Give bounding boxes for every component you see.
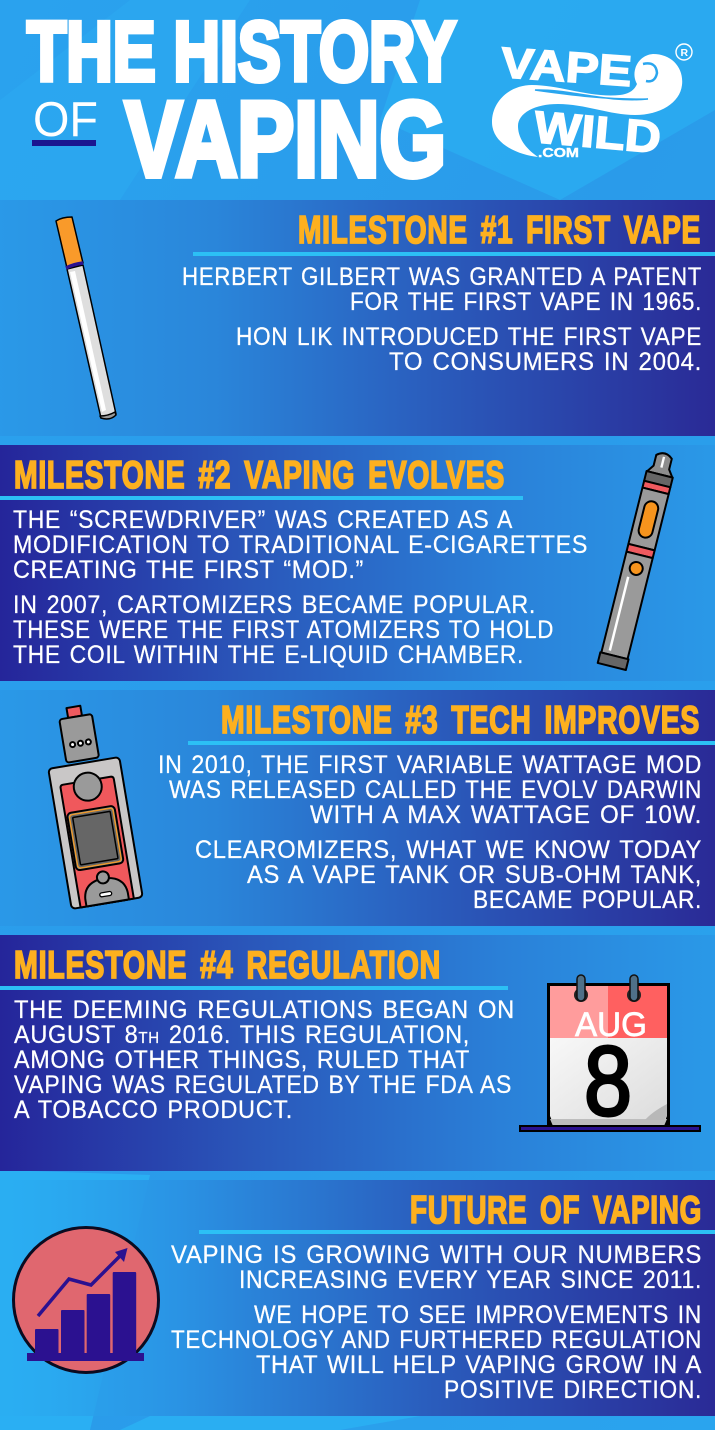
logo wave xyxy=(492,54,682,157)
panel: future of vaping xyxy=(0,1180,715,1416)
text: milestone 2: THE “SCREWDRIVER” WAS CREATED AS A xyxy=(13,506,513,534)
text: milestone 2 xyxy=(13,506,588,669)
text: milestone 2: CREATING THE FIRST “MOD.” xyxy=(13,556,364,584)
logo word: vape: VAPE xyxy=(499,39,633,96)
icon: growth chart xyxy=(14,1228,158,1372)
text: milestone 1 xyxy=(182,263,702,376)
logo word: wild: WILD xyxy=(532,101,663,163)
text: milestone 4: THE DEEMING REGULATIONS BEGAN ON xyxy=(14,996,515,1024)
text: future of vaping xyxy=(171,1241,702,1404)
text: milestone 2: THE COIL WITHIN THE E-LIQUID CHAMBER. xyxy=(13,641,524,669)
calendar date: 8 xyxy=(584,1026,632,1136)
panel: milestone 4 xyxy=(0,935,715,1171)
underline under of xyxy=(32,140,96,146)
text: milestone 3: AS A VAPE TANK OR SUB-OHM TANK, xyxy=(247,861,702,889)
panel: milestone 1 xyxy=(0,200,715,436)
text: milestone 3: WITH A MAX WATTAGE OF 10W. xyxy=(310,801,702,829)
calendar month: AUG xyxy=(575,1006,647,1044)
text: future of vaping: VAPING IS GROWING WITH OUR NUMBERS xyxy=(171,1241,702,1269)
text: milestone 4: AUGUST 8TH 2016. THIS REGULATION, xyxy=(14,1021,470,1049)
icon: vape pen xyxy=(598,450,679,670)
text: milestone 2: MODIFICATION TO TRADITIONAL E-CIGARETTES xyxy=(13,531,588,559)
icon: e-cigarette xyxy=(56,217,116,419)
panel: milestone 3 xyxy=(0,690,715,926)
title xyxy=(27,4,456,199)
icon: box mod xyxy=(39,701,143,909)
text: milestone 1: TO CONSUMERS IN 2004. xyxy=(389,348,702,376)
title word: vaping: VAPING xyxy=(125,79,446,199)
logo: vape wild xyxy=(492,39,692,163)
registered mark xyxy=(676,44,692,60)
text: milestone 4 xyxy=(14,996,515,1124)
title word: of: OF xyxy=(33,93,98,147)
panel: milestone 2 xyxy=(0,445,715,681)
heading: milestone 4: MILESTONE #4 REGULATION xyxy=(14,944,441,987)
icon: calendar xyxy=(520,975,700,1136)
text: milestone 4: AMONG OTHER THINGS, RULED THAT xyxy=(14,1046,470,1074)
heading: milestone 2: MILESTONE #2 VAPING EVOLVES xyxy=(14,454,505,497)
text: milestone 2: THESE WERE THE FIRST ATOMIZERS TO HOLD xyxy=(13,616,554,644)
title line: the history: THE HISTORY xyxy=(27,4,456,98)
text: milestone 4: A TOBACCO PRODUCT. xyxy=(14,1096,293,1124)
text: milestone 3: CLEAROMIZERS, WHAT WE KNOW TODAY xyxy=(195,836,702,864)
text: milestone 3 xyxy=(158,751,702,914)
text: milestone 4: VAPING WAS REGULATED BY THE FDA AS xyxy=(14,1071,512,1099)
registered mark: R xyxy=(680,47,688,59)
logo domain: .COM xyxy=(538,145,579,160)
text: milestone 2: IN 2007, CARTOMIZERS BECAME POPULAR. xyxy=(13,591,536,619)
